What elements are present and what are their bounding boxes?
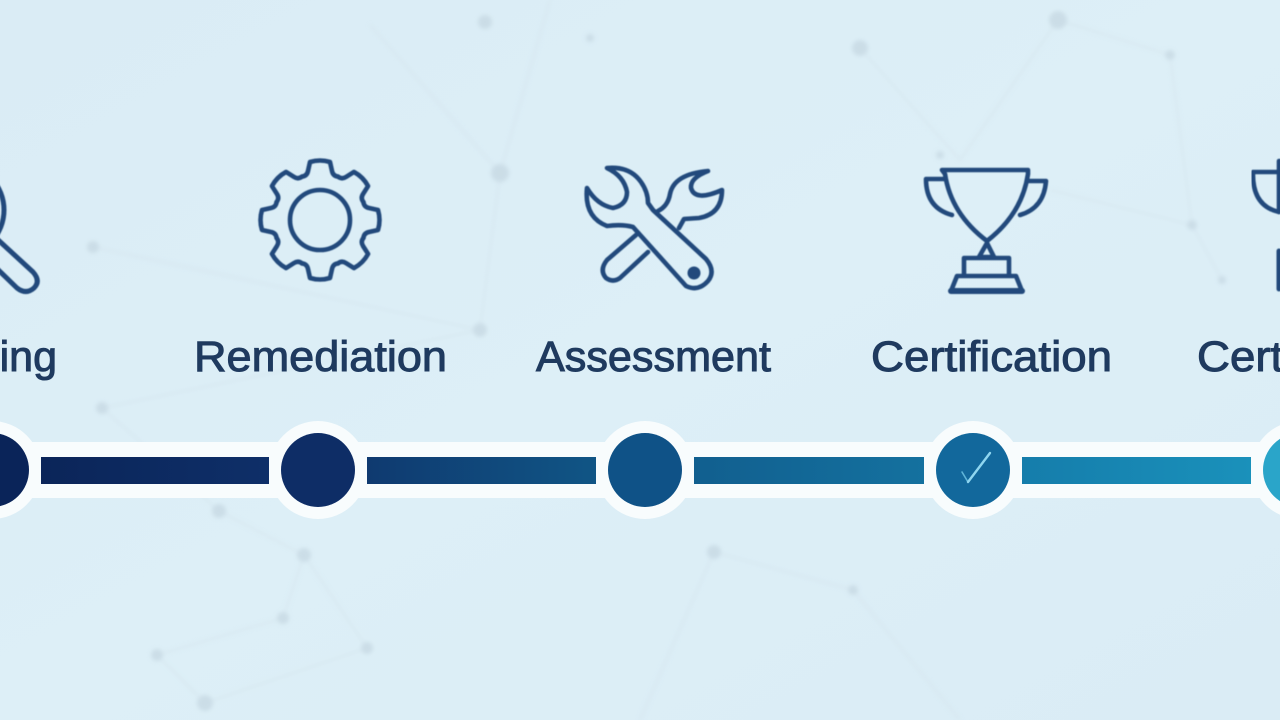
timeline node 5: [1251, 421, 1280, 519]
label: Certification: Certification: [871, 333, 1112, 381]
timeline segment 1: [41, 457, 269, 484]
icon: trophy: [926, 170, 1046, 291]
timeline white band: [0, 442, 1280, 498]
timeline node 4 with check mark: [924, 421, 1022, 519]
label: Assessment: Assessment: [536, 333, 771, 381]
timeline node 2: [269, 421, 367, 519]
icon: second trophy (cropped at right edge): [1253, 161, 1280, 289]
timeline node 3: [596, 421, 694, 519]
label: Remediation: Remediation: [194, 333, 447, 381]
icon: crossed wrenches: [587, 168, 722, 288]
timeline segment 4: [1022, 457, 1251, 484]
timeline segment 3: [694, 457, 924, 484]
timeline node 1: [0, 421, 41, 519]
icon: gear: [260, 160, 380, 280]
timeline segment 2: [367, 457, 596, 484]
icon: magnifying glass (cropped at left edge): [0, 164, 37, 292]
timeline: [0, 421, 1280, 519]
